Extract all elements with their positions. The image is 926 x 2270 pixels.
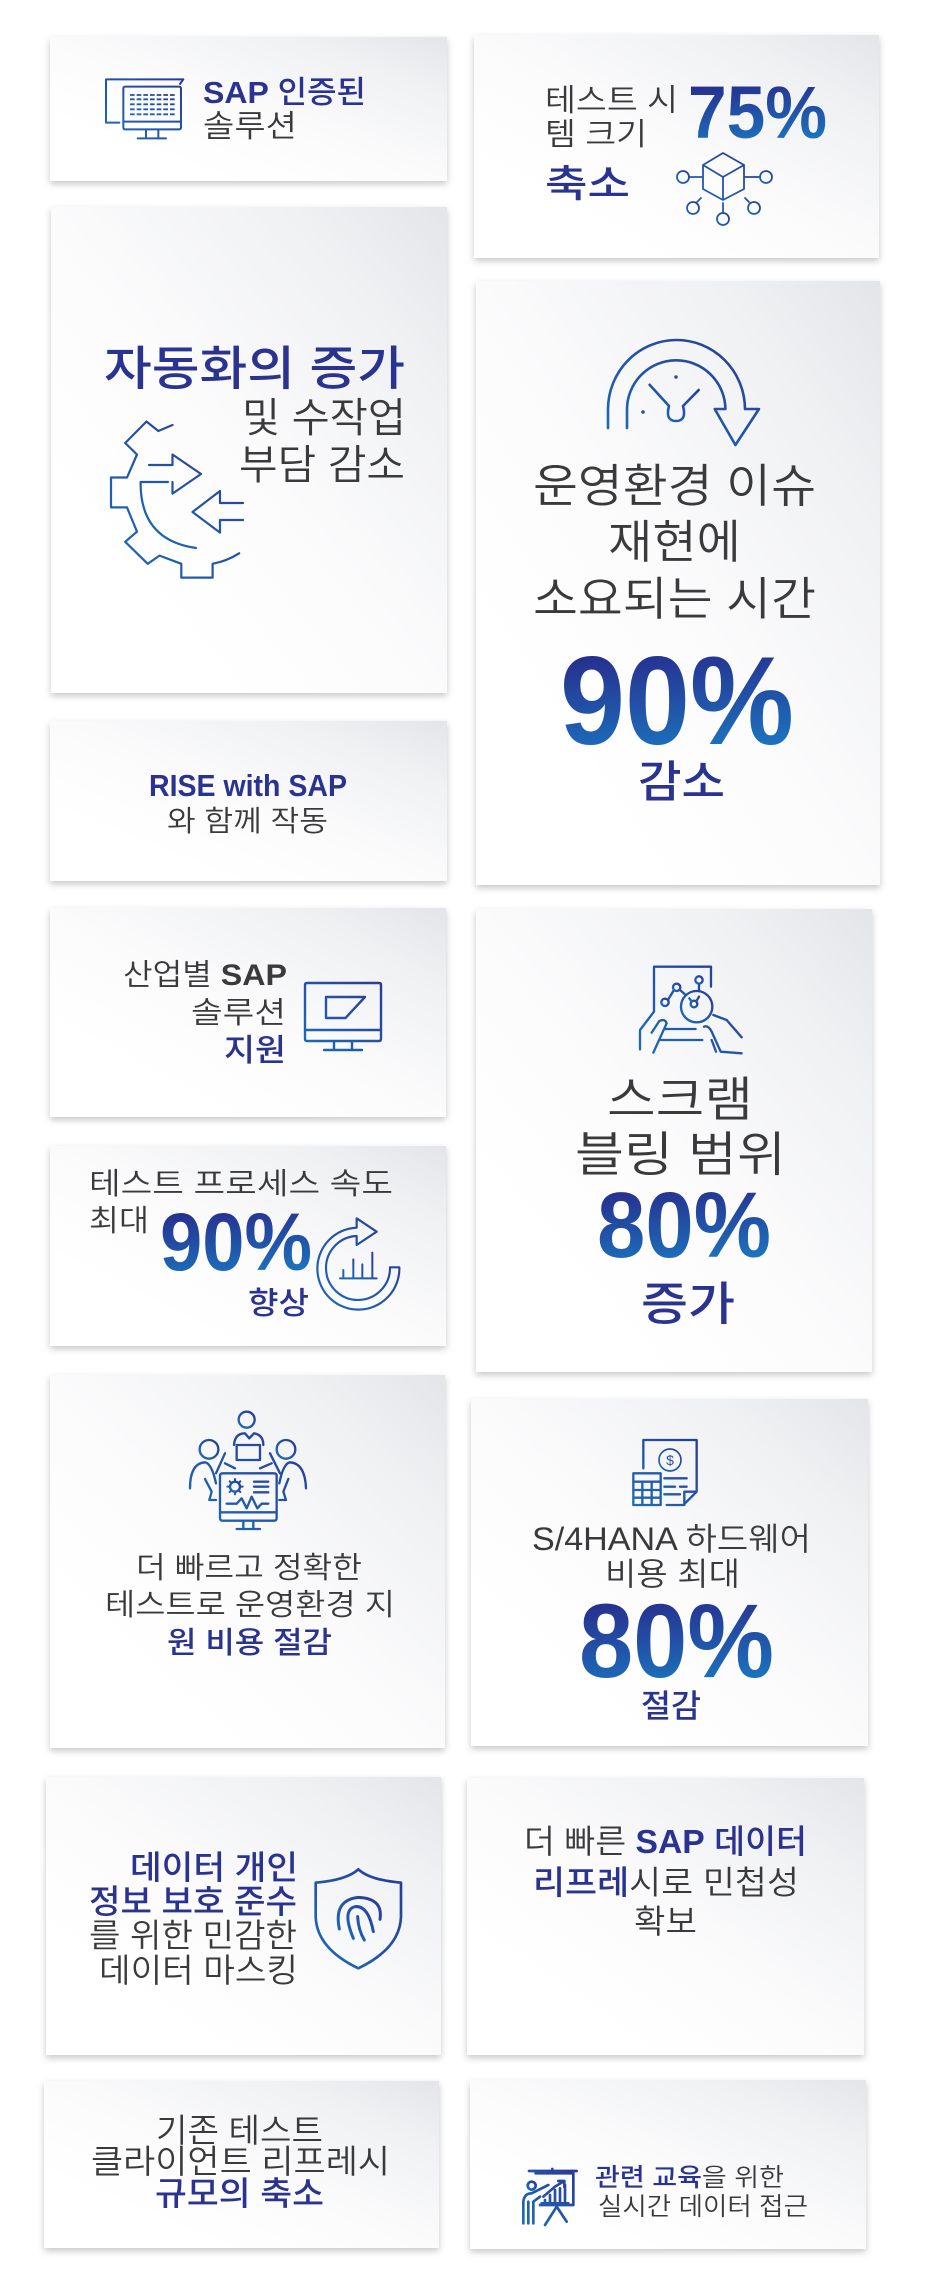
- stat: 90%: 90%: [160, 1197, 312, 1288]
- text: S/4HANA hardware cost: [532, 1521, 811, 1592]
- text: time to reproduce production issues: 소요되는 시간: [533, 573, 816, 625]
- text: faster SAP data refresh: 확보: [634, 1903, 697, 1940]
- text: time to reproduce production issues: 운영환경 이슈: [533, 460, 816, 512]
- icon: invoice and calculator: $: [666, 1452, 674, 1468]
- text: production support cost savings: 테스트로 운영환경 지: [105, 1589, 395, 1622]
- panel: scrambling scope: [476, 909, 872, 1372]
- text: test system size: 템 크기: [545, 117, 647, 152]
- panel: faster SAP data refresh: [467, 1778, 864, 2055]
- text: real-time data access: 실시간 데이터 접근: [598, 2193, 808, 2221]
- stat: 80%: 80%: [579, 1583, 774, 1700]
- stat: 75%: 75%: [688, 71, 827, 154]
- text: real-time data access: 관련 교육 을 위한: [595, 2164, 784, 2192]
- icon: shield with fingerprint: [316, 1869, 401, 1968]
- text: industry SAP solutions: 산업별 SAP: [123, 959, 287, 992]
- text: reduce client refresh scale: 기존 테스트: [156, 2112, 323, 2149]
- text: industry SAP solutions: [123, 959, 287, 1068]
- text: SAP certified solution: SAP 인증된: [203, 75, 366, 110]
- text: production support cost savings: [105, 1552, 395, 1660]
- icon: presenter with chart: [523, 2169, 577, 2225]
- text: production support cost savings: 원 비용 절감: [167, 1627, 332, 1660]
- panel: S/4HANA hardware cost: [471, 1399, 868, 1746]
- text: reduce client refresh scale: 클라이언트 리프레시: [91, 2143, 390, 2180]
- text: data privacy masking: 데이터 개인: [130, 1849, 298, 1886]
- text: SAP certified solution: [203, 75, 366, 144]
- text: RISE with SAP: 와 함께 작동: [167, 806, 328, 838]
- text: reduce client refresh scale: 규모의 축소: [155, 2175, 324, 2212]
- text: reduction: 감소: [638, 758, 725, 807]
- panel: industry SAP solution support: [50, 908, 446, 1117]
- stat: 80%: 80%: [597, 1173, 771, 1277]
- icon: gear with arrows: [111, 422, 243, 578]
- text: industry SAP solutions: 솔루션: [191, 997, 286, 1030]
- text: real-time data access: [595, 2164, 808, 2221]
- text: data privacy masking: 데이터 마스킹: [99, 1952, 298, 1989]
- text: data privacy masking: [89, 1849, 298, 1989]
- text: RISE with SAP: RISE with SAP: [149, 768, 347, 803]
- icon: team around monitor: [190, 1412, 306, 1529]
- icon: clock with arrow: [608, 340, 759, 445]
- text: faster SAP data refresh: 리프레시로 민첩성: [533, 1864, 799, 1901]
- text: scrambling scope: [575, 1074, 786, 1182]
- text: RISE with SAP: [149, 768, 347, 838]
- text: savings: 절감: [641, 1688, 701, 1724]
- text: industry SAP solutions: 지원: [224, 1033, 286, 1068]
- text: increased automation: 자동화의 증가: [104, 342, 405, 395]
- text: increased automation: 부담 감소: [239, 442, 405, 488]
- text: data privacy masking: 정보 보호 준수: [89, 1883, 297, 1920]
- text: time to reproduce production issues: [533, 460, 816, 625]
- icon: monitor with code: [106, 79, 183, 138]
- panel: production issue reproduction time: [476, 281, 880, 885]
- text: test system size: 축소: [545, 164, 630, 206]
- text: test system size: 테스트 시: [545, 83, 678, 118]
- panel: production support cost savings: [50, 1375, 445, 1748]
- text: faster SAP data refresh: 더 빠른 SAP 데이터: [524, 1823, 807, 1860]
- text: test system size: [545, 83, 678, 206]
- panel: test system size reduction: [474, 35, 879, 258]
- stat: 90%: 90%: [560, 632, 794, 771]
- panel: SAP certified solution: [50, 37, 447, 181]
- text: production support cost savings: 더 빠르고 정확한: [136, 1552, 362, 1585]
- text: S/4HANA hardware cost: S/4HANA 하드웨어: [532, 1521, 811, 1557]
- text: time to reproduce production issues: 재현에: [608, 516, 741, 568]
- text: scrambling scope: 블링 범위: [575, 1129, 786, 1182]
- text: reduce client refresh scale: [91, 2112, 390, 2212]
- text: test process speed: [89, 1168, 393, 1238]
- text: scrambling scope: 스크램: [607, 1074, 753, 1127]
- panel: increased automation: [51, 207, 447, 693]
- icon: tablet and magnifier: [640, 967, 742, 1053]
- panel: real-time data access for training: [470, 2080, 866, 2249]
- icon: cube network: [677, 153, 772, 225]
- text: test process speed: 테스트 프로세스 속도: [89, 1168, 393, 1201]
- panel: reduce test client refresh scale: [44, 2081, 439, 2248]
- text: increase: 증가: [641, 1278, 735, 1330]
- icon: invoice and calculator: [633, 1440, 697, 1505]
- text: S/4HANA hardware cost: 비용 최대: [605, 1556, 740, 1592]
- text: improvement: 향상: [248, 1286, 309, 1321]
- panel: test process speed: [50, 1146, 446, 1346]
- text: data privacy masking: 를 위한 민감한: [89, 1917, 297, 1954]
- text: increased automation: [104, 342, 406, 488]
- text: SAP certified solution: 솔루션: [203, 109, 297, 144]
- panel: data privacy masking: [46, 1777, 441, 2055]
- text: test process speed: 최대: [89, 1205, 149, 1238]
- icon: monitor: [305, 983, 381, 1050]
- panel: works with RISE with SAP: [50, 721, 447, 881]
- text: faster SAP data refresh: [524, 1823, 807, 1940]
- icon: circular arrow chart: [317, 1218, 399, 1310]
- text: increased automation: 및 수작업: [242, 395, 406, 441]
